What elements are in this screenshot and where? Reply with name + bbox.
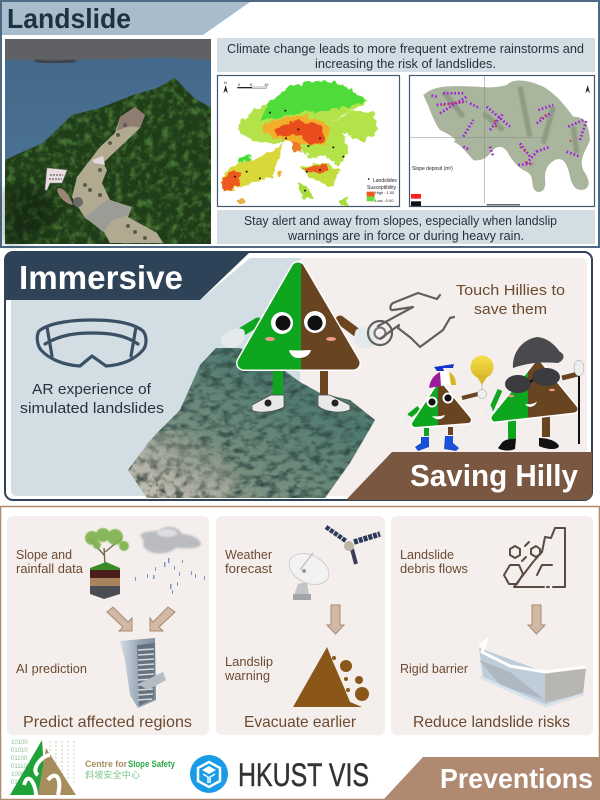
logo: HKUST VIS — [190, 755, 369, 793]
labels — [16, 547, 87, 676]
map legend labels — [224, 80, 397, 203]
map legend labels: 5 — [250, 82, 253, 87]
map legend labels: High : 1.00 — [375, 190, 395, 195]
icon: landslide mountain — [293, 647, 369, 707]
icon: radar dish — [284, 547, 334, 600]
panel: immersive / saving hilly — [5, 252, 592, 500]
panel: preventions — [0, 506, 600, 800]
heading banner: Landslide — [2, 2, 250, 35]
logo: Centre for Slope Safety: Slope Safety — [128, 759, 175, 769]
labels: Rigid barrier — [400, 661, 469, 676]
icon: debris flow — [504, 528, 565, 587]
logo: Centre for Slope Safety — [10, 740, 175, 795]
icon: tree on soil block — [85, 528, 129, 599]
banner: Preventions — [383, 757, 600, 800]
icon: rigid barrier — [479, 641, 586, 706]
card: evacuate earlier — [216, 516, 385, 735]
text: AR experience: AR experience of — [32, 381, 152, 398]
icon: server rack — [120, 638, 166, 708]
text box: climate change — [217, 38, 595, 72]
map: slope deposits — [409, 76, 594, 206]
banner: Saving Hilly — [346, 452, 592, 500]
labels — [224, 547, 273, 683]
heading banner: Landslide: Landslide — [7, 3, 131, 34]
labels: Slope and — [16, 547, 72, 562]
text: AR experience: simulated landslides — [20, 400, 164, 417]
map legend labels: Susceptibility — [367, 185, 397, 191]
labels: warning — [224, 668, 270, 683]
heading banner: Immersive: Immersive — [19, 259, 183, 296]
heading banner: Immersive — [5, 252, 250, 300]
panel: landslide — [1, 1, 599, 247]
caption: Evacuate earlier — [244, 714, 357, 731]
labels: forecast — [225, 561, 272, 576]
map legend title: Slope deposit (m³) — [412, 166, 453, 172]
text: Touch Hillies: save them — [474, 301, 547, 318]
landslide 3D scene image — [5, 39, 211, 244]
icon: rain cloud — [135, 527, 205, 594]
map legend labels: N — [224, 80, 227, 85]
text box: stay alert: warnings are in force or during heavy rain. — [287, 228, 524, 243]
labels: rainfall data — [16, 561, 84, 576]
logo: HKUST VIS: HKUST VIS — [238, 757, 369, 793]
icon: touching hand — [368, 293, 454, 347]
labels: debris flows — [400, 561, 468, 576]
logo: Centre for Slope Safety: 01010 — [11, 780, 28, 786]
text box: stay alert: Stay alert and away from slopes, especially when landslip — [244, 213, 557, 228]
banner: Saving Hilly: Saving Hilly — [410, 458, 579, 493]
satellite terrain — [128, 348, 375, 498]
map legend labels: Landslides — [373, 178, 397, 184]
banner: Preventions: Preventions — [440, 763, 593, 794]
logo: Centre for Slope Safety: 01100 — [11, 756, 28, 762]
card: reduce landslide risks — [391, 516, 593, 735]
logo: Centre for Slope Safety: 01010 — [11, 748, 28, 754]
logo: Centre for Slope Safety: Centre for — [85, 759, 127, 769]
logo: Centre for Slope Safety: 10100 — [11, 740, 28, 746]
icon: AR goggles — [37, 320, 146, 366]
map legend labels: 10 — [264, 82, 269, 87]
logo: Centre for Slope Safety: 01110 — [11, 764, 27, 770]
logo: Centre for Slope Safety: 10001 — [11, 772, 28, 778]
character: grandpa Hilly with cane — [486, 337, 584, 451]
map legend labels: 0 — [238, 82, 241, 87]
arrow: down — [327, 605, 344, 634]
text box: climate change: Climate change leads to more frequent extreme rainstorms and — [227, 41, 584, 56]
card: predict affected regions — [7, 516, 209, 735]
logo: Centre for Slope Safety: 斜坡安全中心 — [85, 769, 140, 780]
labels — [400, 547, 469, 676]
labels: Weather — [225, 547, 273, 562]
character: small Hilly with balloon — [404, 356, 494, 451]
labels: Landslide — [400, 547, 454, 562]
caption: Reduce landslide risks — [413, 714, 570, 731]
icon: satellite — [326, 527, 380, 564]
text: Touch Hillies — [456, 282, 565, 318]
arrow: down right — [107, 607, 132, 631]
text: AR experience — [20, 381, 164, 417]
labels: AI prediction — [16, 661, 87, 676]
text box: climate change: increasing the risk of landslides. — [315, 56, 496, 71]
caption: Predict affected regions — [23, 714, 192, 731]
text box: stay alert — [217, 210, 595, 244]
text: Touch Hillies: Touch Hillies to — [456, 282, 565, 299]
arrow: down left — [150, 607, 175, 631]
map: landslide susceptibility — [218, 76, 400, 206]
arrow: down — [528, 605, 545, 634]
labels: Landslip — [225, 654, 273, 669]
character: big Hilly — [221, 269, 378, 412]
map legend labels: Low : 0.00 — [375, 198, 394, 203]
